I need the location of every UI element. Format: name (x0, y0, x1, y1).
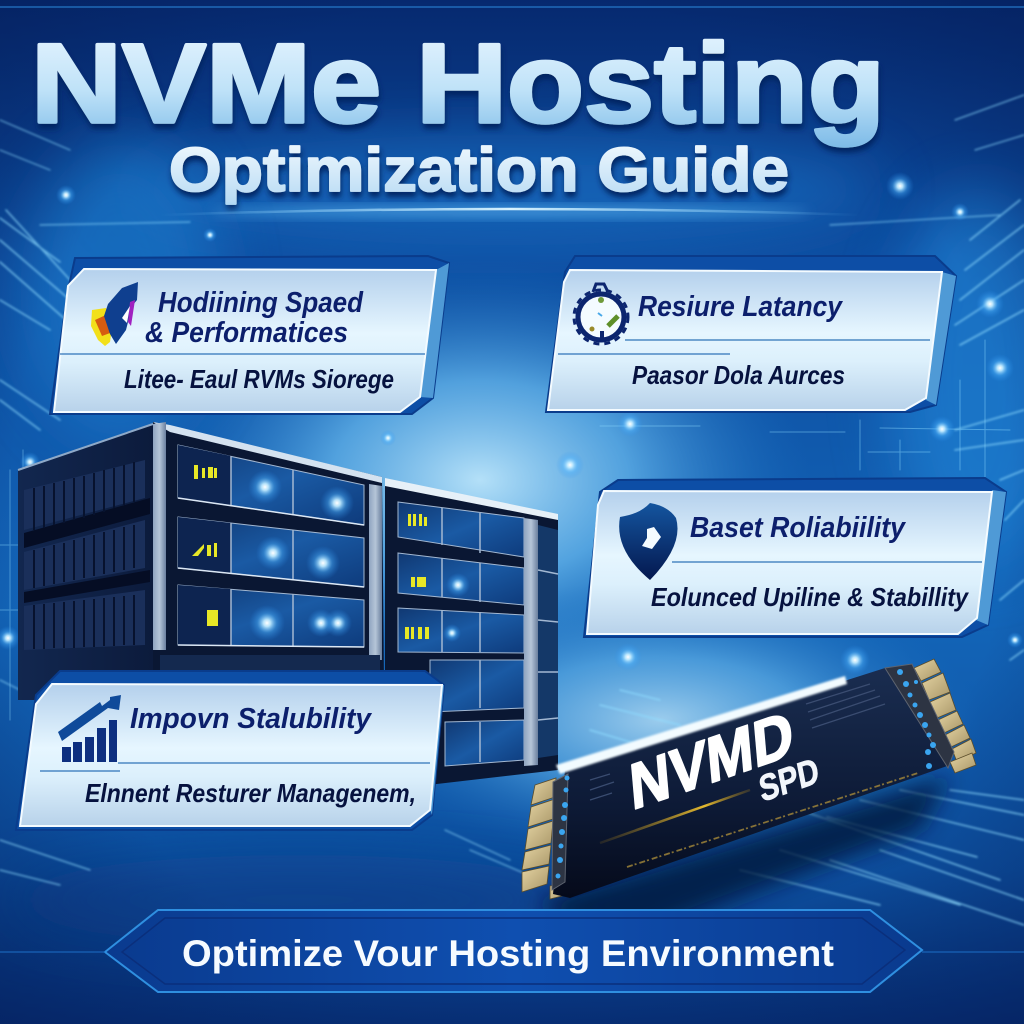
bottom banner (0, 908, 1024, 992)
title underline glow (160, 207, 860, 217)
icon: shield (619, 503, 678, 580)
heading: Hodiining Spaed (158, 287, 364, 319)
ssd shadow (540, 775, 950, 935)
heading second line: & Performatices (145, 317, 348, 349)
ssd body (553, 668, 950, 898)
NVMe SSD drive (522, 659, 976, 935)
ssd label NVMD: NVMD (627, 697, 796, 824)
panel: scalability (16, 671, 444, 830)
subtext: Litee- Eaul RVMs Siorege (124, 364, 394, 394)
subtext: Elnnent Resturer Managenem, (85, 778, 416, 808)
heading: Baset Roliabiility (690, 512, 907, 544)
heading: Impovn Stalubility (130, 703, 373, 735)
rack front block 1 (153, 422, 385, 790)
rack yellow indicators (192, 465, 429, 639)
server racks (18, 422, 558, 790)
rack left side face (18, 424, 153, 700)
subtext: Eolunced Upiline & Stabillity (651, 582, 969, 612)
heading: Resiure Latancy (638, 291, 844, 323)
ssd label SPD: SPD (756, 749, 822, 810)
ssd connector left (522, 778, 574, 899)
panel: speed and performance (50, 256, 449, 414)
panel: reliability (584, 478, 1006, 637)
ssd heatsink lines (590, 684, 885, 800)
glow stars (0, 163, 1023, 720)
subtitle: Optimization Guide: Optimization Guide (169, 136, 789, 205)
rack blue lights (248, 470, 470, 642)
ssd gold lines (600, 790, 750, 843)
banner text: Optimize Vour Hosting Environment (182, 933, 834, 974)
ssd rough ends (552, 664, 954, 890)
ssd connector right (914, 659, 976, 773)
ssd top highlight (556, 676, 847, 774)
icon: gear ring (574, 284, 628, 344)
rack front block 2 (385, 478, 558, 790)
subtext: Paasor Dola Aurces (632, 360, 845, 390)
title line: NVMe Hosting: NVMe Hosting (31, 21, 885, 146)
panel: latency (546, 256, 956, 412)
icon: growth chart (58, 695, 121, 762)
ssd blue dots (556, 669, 936, 878)
icon: rocket (91, 282, 138, 346)
